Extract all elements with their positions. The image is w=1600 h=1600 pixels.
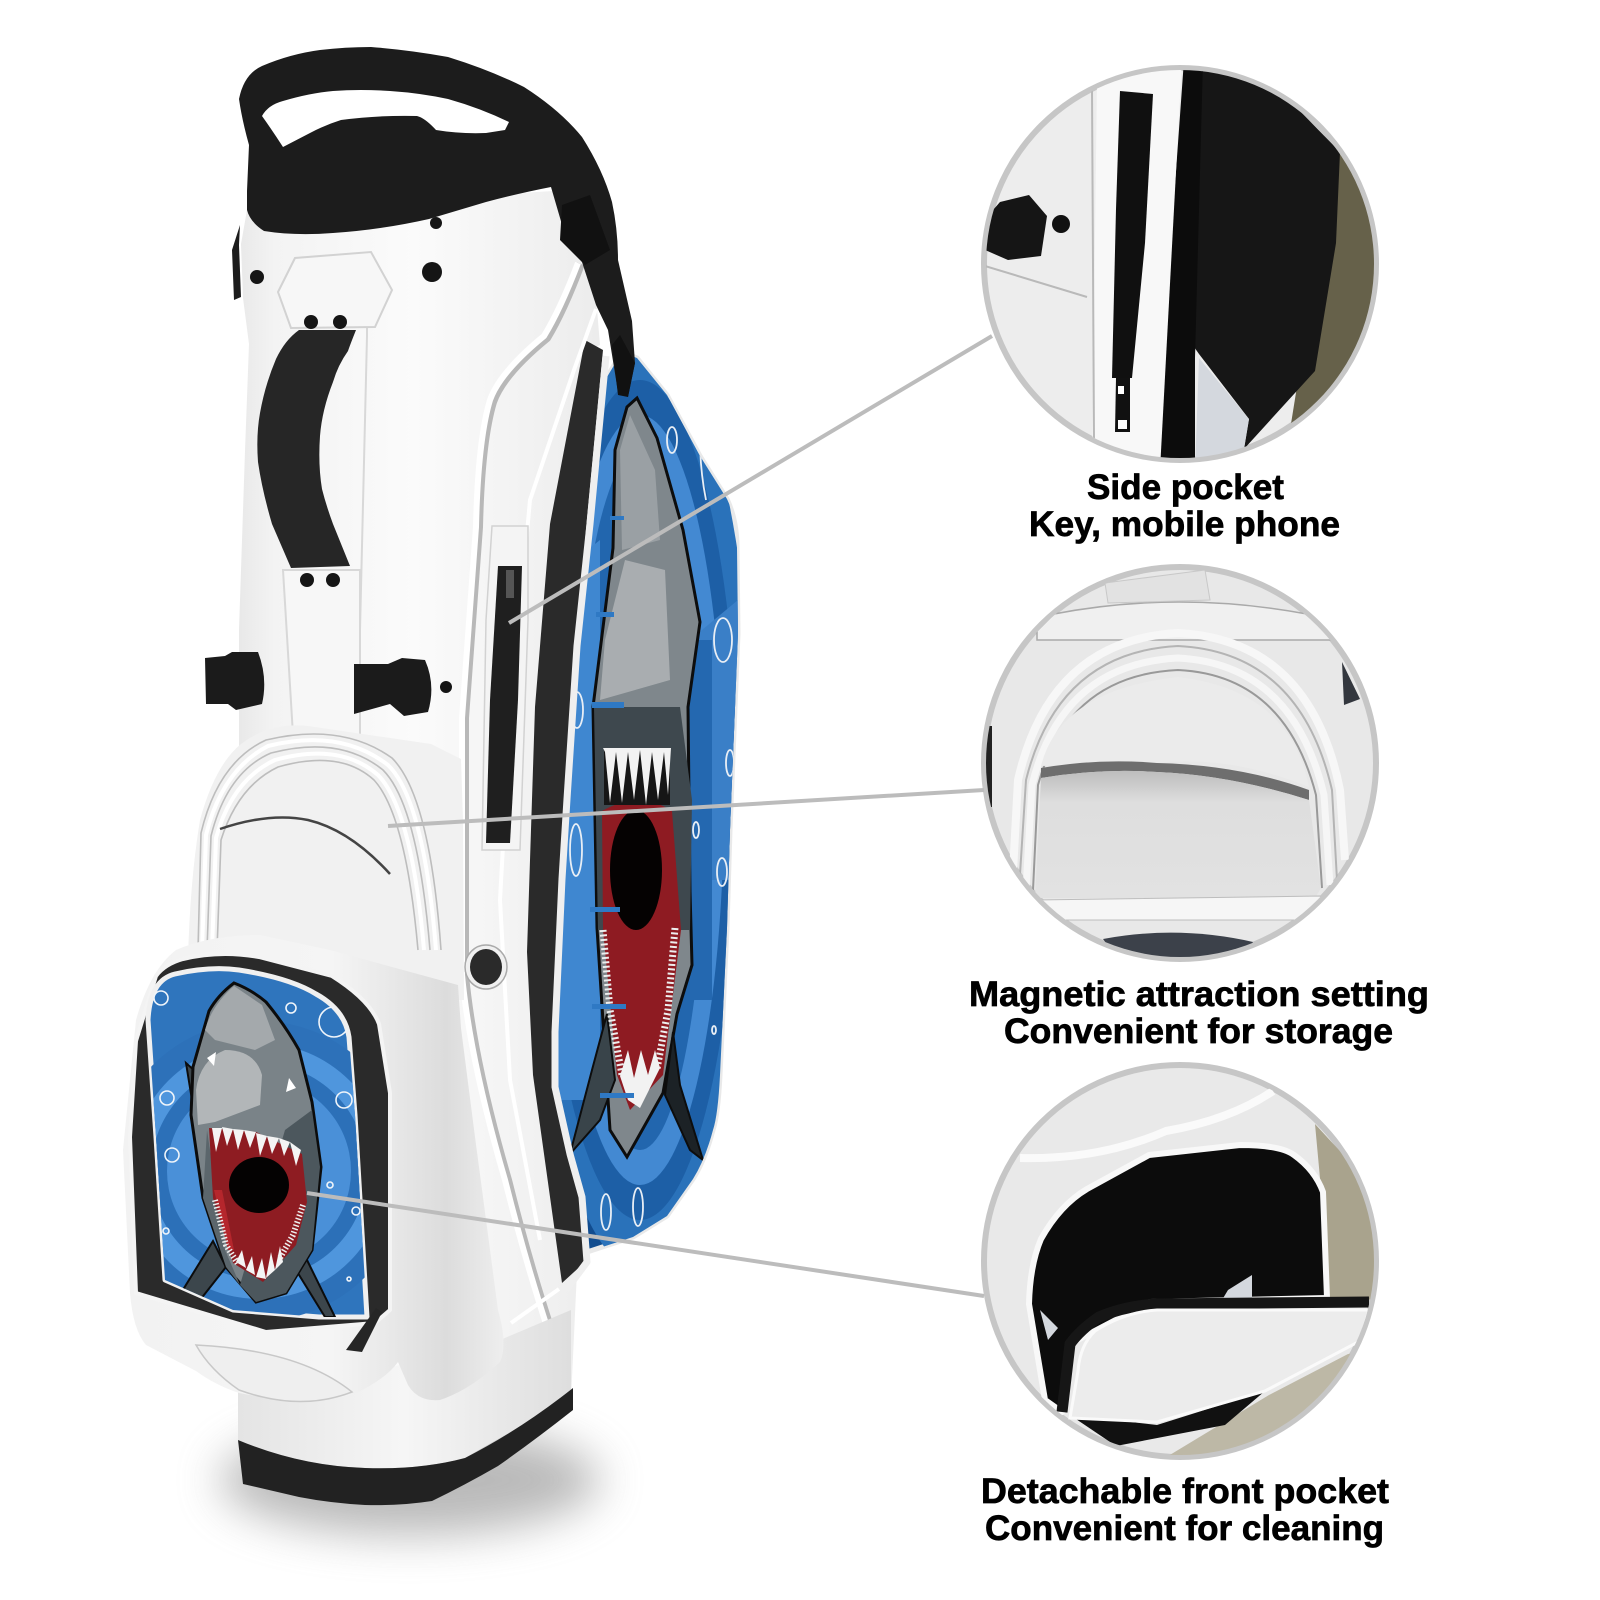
caption: side pocket — [1029, 468, 1340, 544]
inner flap — [1042, 706, 1084, 766]
right buckle — [354, 658, 452, 716]
body piping — [462, 263, 578, 1330]
side pocket zipper — [482, 526, 528, 850]
flap shadow — [1041, 761, 1309, 800]
detail circle: side pocket — [980, 60, 1385, 470]
front bubbles — [154, 991, 360, 1281]
caption: side pocket: Key, mobile phone — [1029, 505, 1340, 544]
side shark body — [593, 398, 700, 1157]
leader line: detachable pocket — [307, 1193, 984, 1296]
rivet — [1052, 215, 1070, 233]
zipper pull — [1115, 378, 1130, 432]
pocket zipper pull — [346, 1308, 382, 1352]
silver inner panel — [1196, 358, 1249, 458]
main bag body — [230, 191, 600, 1400]
lower pocket — [1035, 771, 1321, 898]
front pocket shell — [123, 935, 504, 1400]
stitched seam — [985, 90, 1094, 440]
caption: detachable pocket — [981, 1472, 1389, 1548]
lower grip patch — [283, 570, 360, 735]
left buckle — [205, 652, 264, 710]
right dark gap — [1342, 662, 1360, 705]
eye highlights — [207, 1052, 296, 1092]
caption: detachable pocket: Detachable front pocket — [981, 1472, 1389, 1511]
left dark gap — [986, 726, 992, 807]
magnet button — [465, 945, 507, 989]
side panel with shark print — [558, 354, 740, 1254]
side shark teeth — [604, 750, 670, 805]
ground shadow — [220, 1425, 600, 1535]
black side band — [1159, 60, 1203, 470]
front shark body — [191, 983, 321, 1302]
front shark mouth — [209, 1128, 307, 1282]
strap clip — [560, 195, 635, 397]
detail circle: magnetic pocket — [984, 567, 1376, 970]
strap buckle — [980, 195, 1047, 260]
pocket lower flap — [196, 1345, 352, 1402]
middle pocket — [188, 725, 464, 1000]
black sole — [238, 1388, 573, 1505]
front shark teeth — [212, 1127, 301, 1279]
second piping — [500, 309, 596, 1240]
lid zipper — [1062, 1302, 1369, 1412]
front pocket print — [146, 966, 370, 1320]
white piping — [1092, 60, 1182, 470]
caption: detachable pocket: Convenient for cleaning — [985, 1509, 1384, 1548]
pocket zipper — [1112, 91, 1153, 378]
dark opening — [1103, 932, 1253, 957]
lid lower lining — [1070, 1391, 1265, 1446]
caption: side pocket: Side pocket — [1087, 468, 1284, 507]
white piping beside strip — [555, 356, 606, 1290]
golf bag illustration — [109, 47, 755, 1535]
black side strip — [527, 340, 603, 1283]
black interior — [1029, 1145, 1327, 1412]
bottom band — [1035, 896, 1345, 920]
leader line: magnetic pocket — [388, 790, 984, 826]
side bubbles — [570, 400, 734, 1230]
body piping shadow — [465, 264, 581, 1330]
caption: magnetic attraction: Convenient for storage — [1004, 1012, 1393, 1051]
pocket lining — [1195, 71, 1340, 447]
arched ribs — [1012, 633, 1345, 890]
left edge clip — [232, 225, 241, 300]
piping arc — [1020, 1091, 1273, 1158]
front shark fins — [181, 1063, 335, 1317]
side carry grip — [257, 330, 356, 568]
base — [238, 1310, 571, 1468]
detail circle: detachable pocket — [984, 1065, 1385, 1470]
beige floor — [1170, 1354, 1350, 1455]
hexagon patch — [278, 252, 392, 328]
black rivets — [250, 217, 442, 329]
top band — [1037, 602, 1340, 640]
leader line: side pocket — [509, 336, 992, 623]
upper patch — [1105, 570, 1210, 603]
top handle and mesh collar — [239, 47, 635, 397]
beige wall — [1315, 1124, 1374, 1300]
silver lining glimpse — [1040, 1275, 1252, 1340]
front pocket zipper ring — [130, 954, 390, 1332]
caption: magnetic attraction — [969, 975, 1429, 1051]
vertical seam — [360, 252, 367, 630]
side print slices — [590, 516, 634, 1098]
khaki backdrop — [1291, 150, 1374, 423]
caption: magnetic attraction: Magnetic attraction setting — [969, 975, 1429, 1014]
white lid — [1070, 1310, 1369, 1422]
